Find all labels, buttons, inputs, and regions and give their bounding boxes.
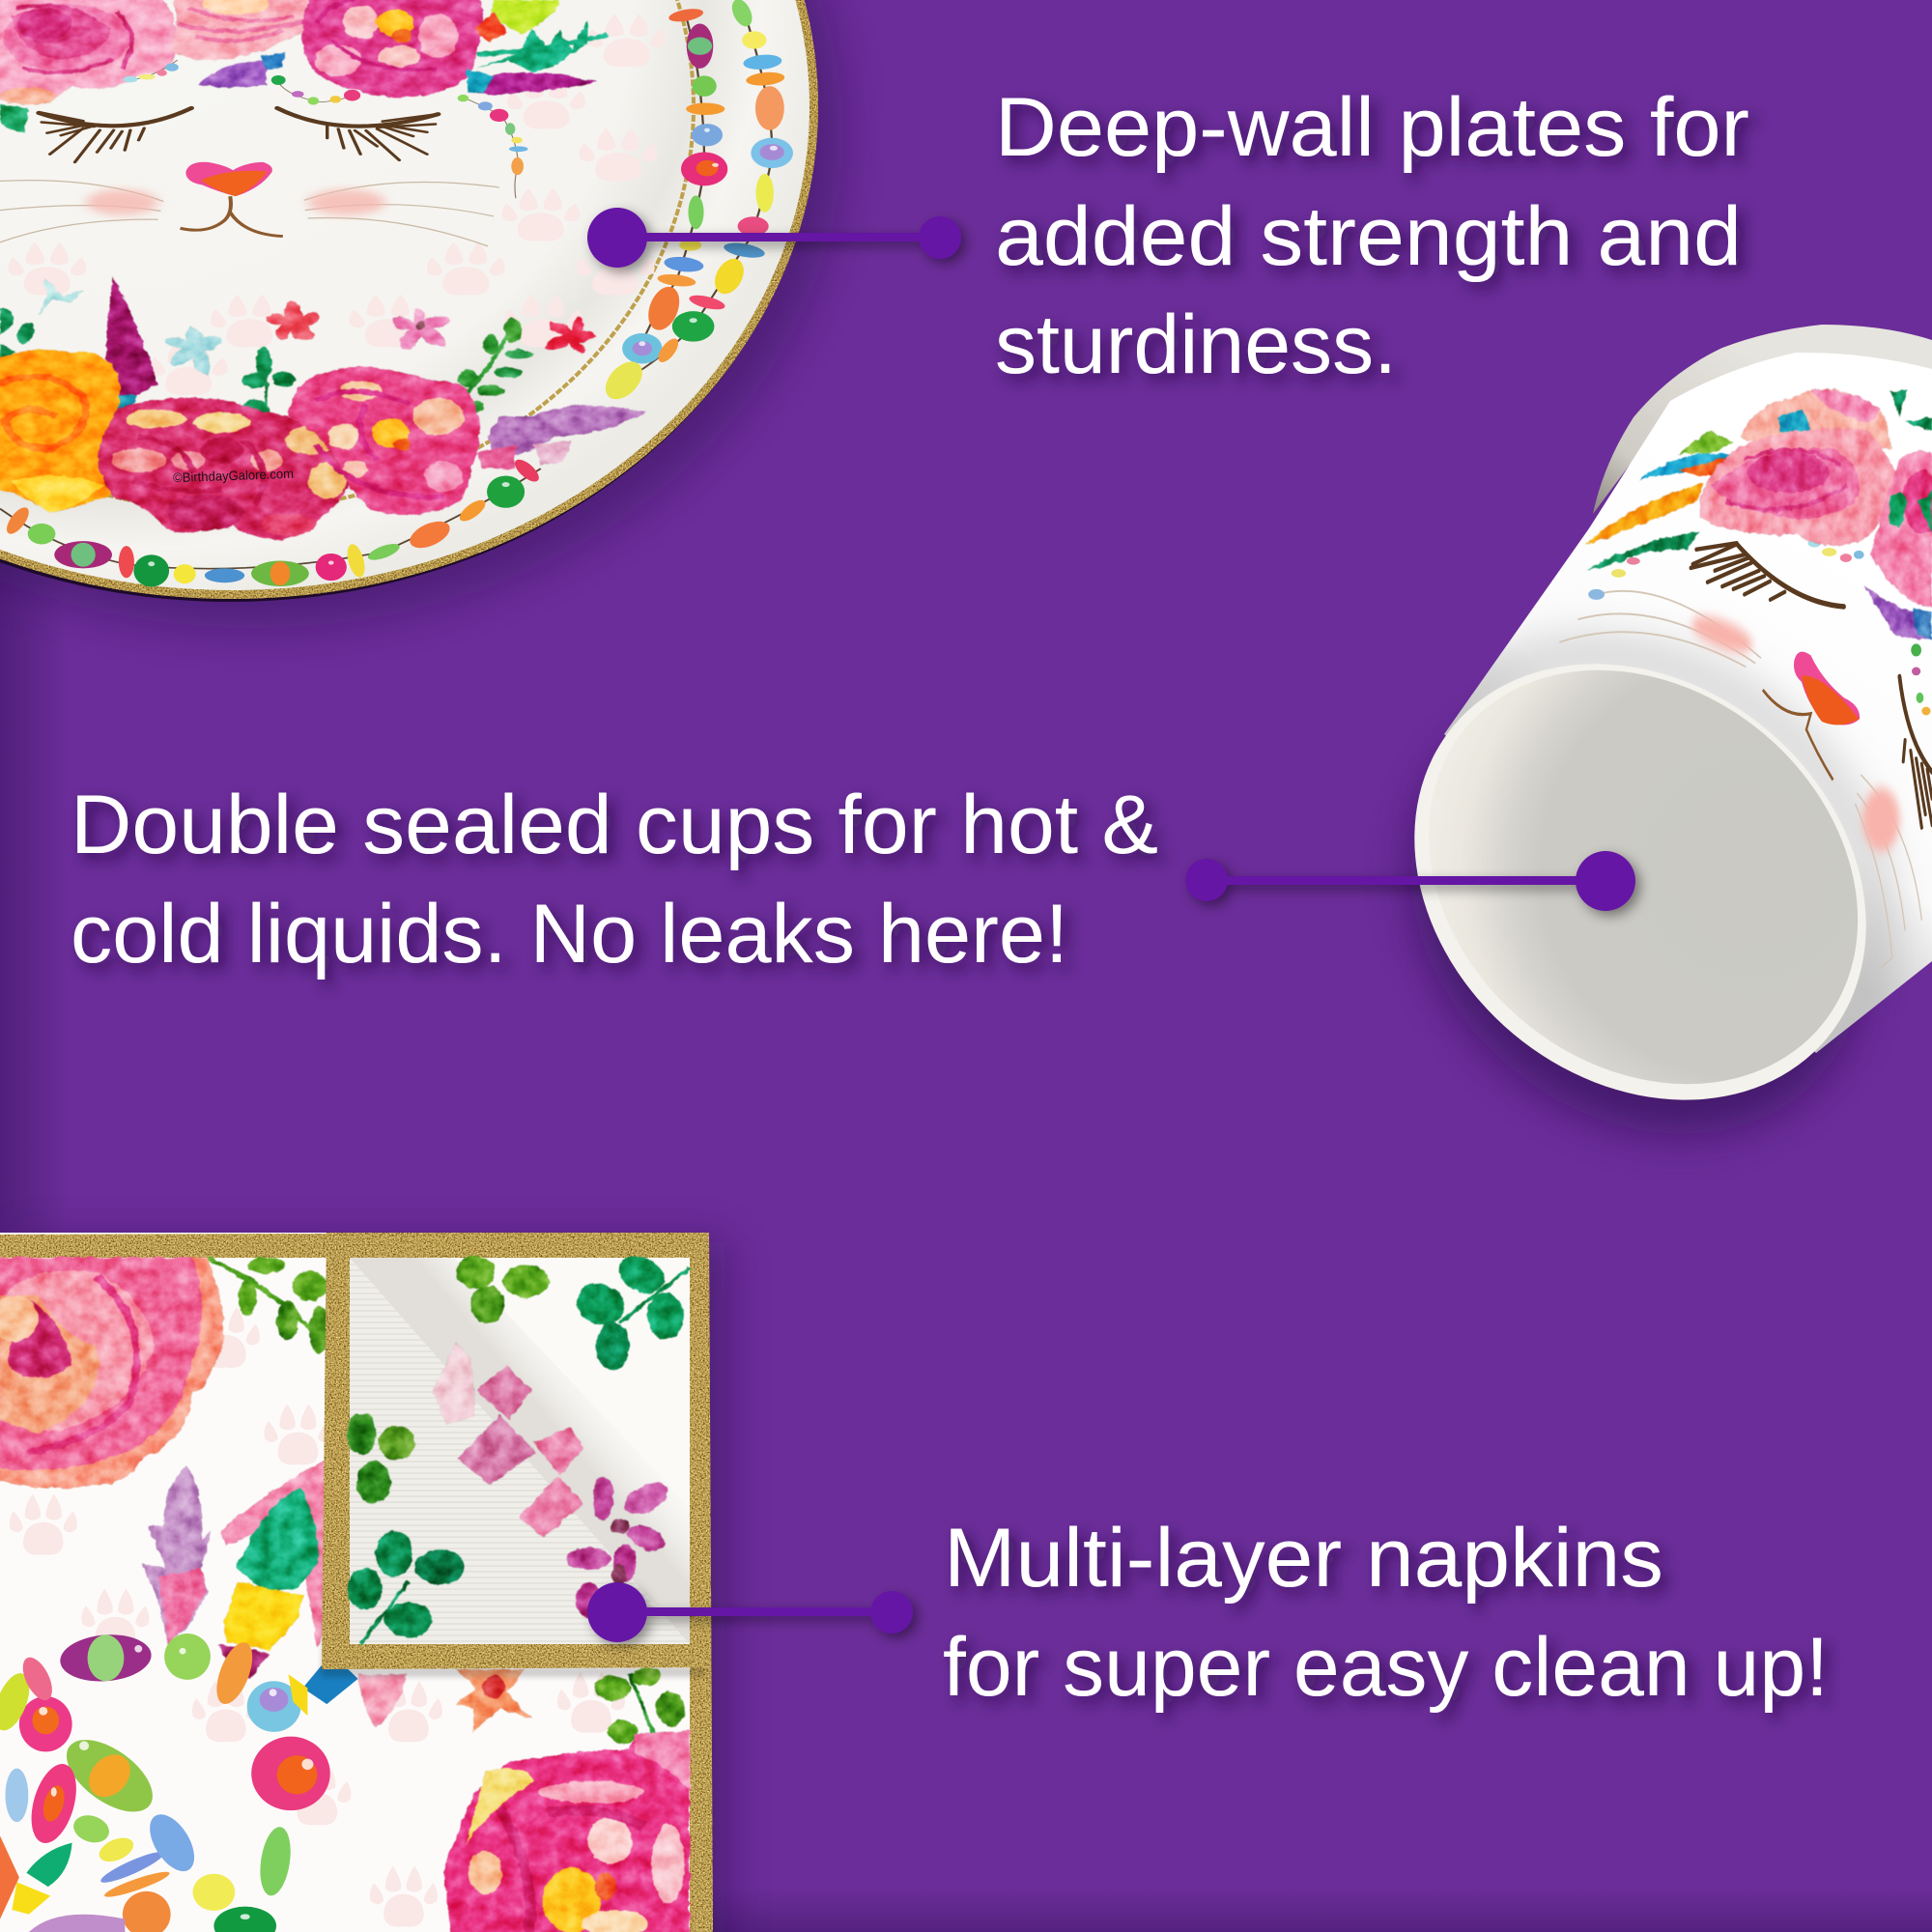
cup base disc [1345, 584, 1932, 1170]
gold glitter rim [0, 0, 818, 599]
text block: cups: Double sealed cups for hot & [71, 779, 1158, 871]
top clovers [457, 1250, 690, 1370]
callout connector: cups [1185, 851, 1635, 911]
text block: cups [71, 779, 1158, 980]
inner gold ring [0, 0, 694, 510]
text block: plates [995, 81, 1749, 391]
cup outer rim [1326, 574, 1932, 1190]
copyright text: ©BirthdayGalore.com [173, 467, 294, 485]
fold ribbing [350, 1258, 690, 1644]
cheeks [1690, 610, 1899, 851]
purple feather [477, 406, 646, 469]
orange flower [358, 1669, 531, 1732]
green and yellow feather [218, 1487, 318, 1679]
top foliage and feathers [0, 0, 608, 132]
leaf sprig [207, 1257, 331, 1354]
lower peony two [289, 367, 480, 515]
panel: napkin [0, 1233, 713, 1932]
whiskers [0, 181, 499, 246]
large rose [0, 1258, 224, 1489]
pink flowers [567, 1476, 673, 1618]
text block: plates: added strength and [995, 190, 1742, 283]
flap shadow [321, 1246, 705, 1677]
left eyelashes [39, 108, 191, 162]
lower peony one [98, 398, 355, 541]
eyelashes [1690, 543, 1932, 828]
lilac feather [142, 1466, 212, 1646]
napkin shadow [19, 1242, 724, 1932]
napkin gold border [0, 1233, 713, 1932]
callout connector: plates [587, 208, 961, 268]
underside clovers [347, 1413, 465, 1644]
callout connector: napkins [587, 1582, 913, 1642]
lower right peony [443, 1729, 690, 1932]
text block: napkins: for super easy clean up! [943, 1621, 1829, 1714]
text block: plates: Deep-wall plates for [995, 81, 1749, 174]
panel: paper plate [0, 0, 818, 602]
lower green sprig [594, 1667, 685, 1744]
napkin white field [0, 1233, 696, 1932]
cup edge shading [1445, 618, 1913, 1053]
plate shadow [0, 0, 842, 628]
pink petal behind feather [221, 1457, 334, 1646]
nose and mouth [181, 162, 283, 237]
lower foliage [242, 318, 532, 415]
cup artwork [1559, 389, 1932, 968]
fold underside [350, 1258, 690, 1644]
text block: cups: cold liquids. No leaks here! [71, 888, 1068, 980]
napkin artwork [0, 1257, 690, 1932]
panel: paper cup [1414, 325, 1932, 1100]
cup top roses [1700, 389, 1932, 608]
top centre peach rose [169, 0, 332, 60]
cup shadow [1323, 608, 1932, 1224]
paw prints [8, 14, 666, 395]
nose [1763, 652, 1860, 780]
top left rose [0, 0, 177, 105]
feathers and foliage [1585, 430, 1932, 639]
cup lip [1593, 325, 1932, 514]
right eyelashes [277, 108, 439, 160]
flap white field [350, 1258, 690, 1644]
orange rose [0, 350, 120, 513]
beads and gems [0, 1632, 358, 1932]
flap artwork [347, 1250, 690, 1644]
folded corner flap gold frame [322, 1233, 709, 1669]
plate edge sliver [0, 0, 816, 602]
whiskers [1559, 591, 1921, 968]
hanging bead strands [123, 60, 528, 198]
text block: plates: sturdiness. [995, 298, 1397, 391]
fold shadow [350, 1258, 690, 1644]
top right peony [302, 0, 484, 98]
cup body [1444, 353, 1932, 1053]
plate artwork [0, 0, 793, 586]
pink bow [433, 1342, 583, 1538]
magenta feather [105, 276, 158, 420]
cup bead strands [1588, 539, 1931, 715]
small flowers [0, 278, 596, 376]
plate body [0, 0, 810, 590]
cheeks [86, 189, 385, 215]
text block: napkins: Multi-layer napkins [944, 1512, 1663, 1605]
paw prints [10, 1307, 625, 1927]
rim beads [0, 0, 793, 586]
text block: napkins [943, 1512, 1829, 1714]
